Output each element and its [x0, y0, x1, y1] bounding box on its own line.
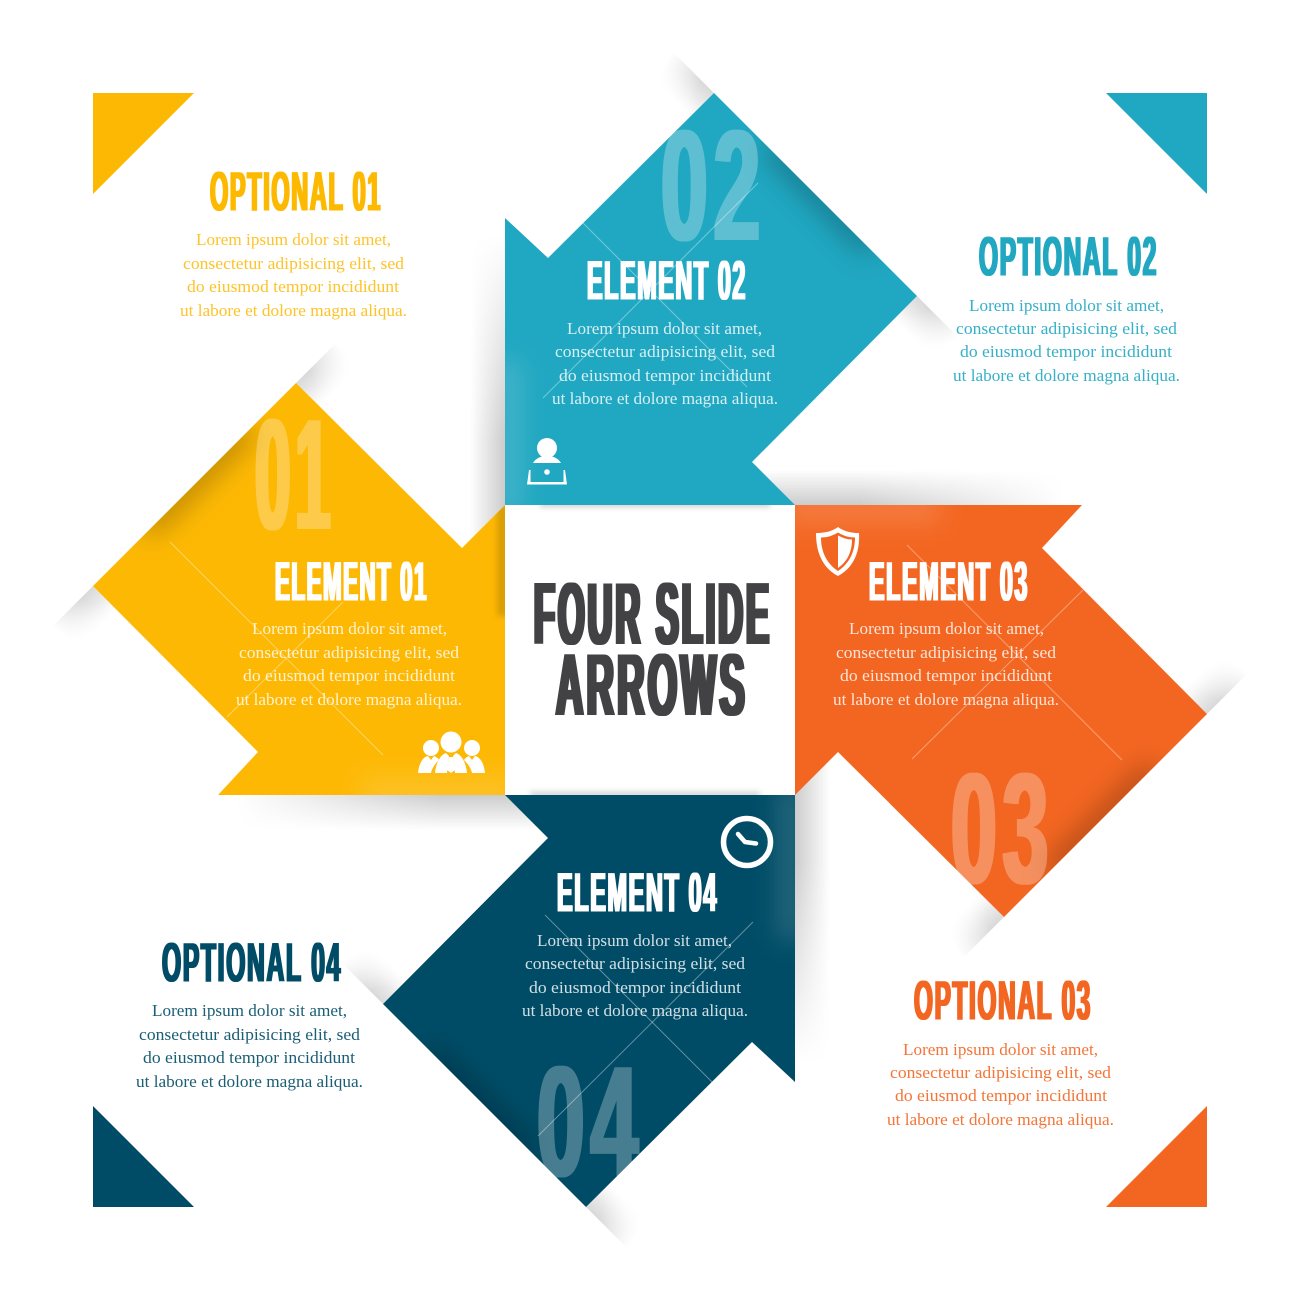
panel: arrow 01 yellow: 01	[255, 387, 335, 563]
panel: center square with title: ARROWS	[556, 635, 748, 734]
body text: element 03: do eiusmod tempor incididunt	[840, 666, 1052, 685]
text block: optional 03: consectetur adipisicing elit, sed	[890, 1063, 1112, 1082]
text: OPTIONAL 04	[162, 930, 342, 994]
body text: element 04: Lorem ipsum dolor sit amet,	[537, 931, 732, 950]
body text: element 04: do eiusmod tempor incididunt	[529, 978, 741, 997]
text block: optional 03: do eiusmod tempor incididunt	[895, 1086, 1107, 1105]
panel: arrow 02 teal: ELEMENT 02	[587, 248, 747, 312]
corner triangle: orange	[1106, 1106, 1207, 1207]
number 04: 04	[537, 1034, 644, 1210]
text block: optional 02: Lorem ipsum dolor sit amet,	[969, 296, 1164, 315]
title	[534, 564, 772, 734]
icon: clock	[724, 818, 770, 866]
panel: arrow 04 navy	[383, 785, 805, 1210]
text: OPTIONAL 01	[210, 160, 382, 222]
panel: arrow 01 yellow	[93, 383, 515, 805]
number 03: 03	[951, 741, 1054, 917]
body text: element 04: consectetur adipisicing elit, sed	[525, 954, 746, 973]
body text: element 03: Lorem ipsum dolor sit amet,	[849, 619, 1044, 638]
body text: element 04	[522, 931, 748, 1020]
panel: arrow 03 orange	[785, 495, 1207, 917]
text block: optional 03: ut labore et dolore magna aliqua.	[887, 1110, 1114, 1129]
body text: element 01: do eiusmod tempor incididunt	[243, 666, 455, 685]
text block: optional 02	[953, 224, 1180, 385]
body text: element 04: ut labore et dolore magna aliqua.	[522, 1001, 748, 1020]
text block: optional 04: Lorem ipsum dolor sit amet,	[152, 1001, 347, 1020]
panel: arrow 01 yellow: ELEMENT 01	[275, 550, 428, 612]
body text: element 02: Lorem ipsum dolor sit amet,	[567, 319, 762, 338]
body text: element 03: consectetur adipisicing elit, sed	[836, 643, 1057, 662]
text block: optional 01: do eiusmod tempor incididunt	[187, 277, 399, 296]
body text: element 02: do eiusmod tempor incididunt	[559, 366, 771, 385]
text block: optional 03	[887, 968, 1114, 1129]
body text: element 03: ut labore et dolore magna aliqua.	[833, 690, 1059, 709]
number 02: 02	[661, 98, 766, 274]
body text: element 02	[552, 319, 778, 408]
text block: optional 01: Lorem ipsum dolor sit amet,	[196, 230, 391, 249]
text: FOUR SLIDE	[534, 564, 772, 663]
text block: optional 04: ut labore et dolore magna aliqua.	[136, 1072, 363, 1091]
body text: element 02: consectetur adipisicing elit, sed	[555, 342, 776, 361]
panel: arrow 03 orange: ELEMENT 03	[869, 550, 1029, 612]
panel: center square with title	[528, 505, 772, 795]
text block: optional 02: do eiusmod tempor incididunt	[960, 342, 1172, 361]
text block: optional 04: consectetur adipisicing elit, sed	[139, 1025, 361, 1044]
body text: element 01: ut labore et dolore magna aliqua.	[236, 690, 462, 709]
corner triangle: navy	[93, 1106, 194, 1207]
icon: shield	[816, 527, 859, 576]
corner triangle: teal	[1106, 93, 1207, 194]
body text: element 03	[833, 619, 1059, 709]
text block: optional 04	[136, 930, 363, 1091]
panel: arrow 04 navy: ELEMENT 04	[557, 860, 718, 924]
text block: optional 02: consectetur adipisicing elit, sed	[956, 319, 1178, 338]
panel: arrow 02 teal	[495, 93, 917, 515]
text block: optional 01: ut labore et dolore magna aliqua.	[180, 301, 407, 320]
body text: element 01: consectetur adipisicing elit, sed	[239, 643, 460, 662]
text block: optional 04: do eiusmod tempor incididunt	[143, 1048, 355, 1067]
icon: team of people	[418, 732, 485, 773]
text block: optional 03: Lorem ipsum dolor sit amet,	[903, 1040, 1098, 1059]
text block: optional 02: ut labore et dolore magna aliqua.	[953, 366, 1180, 385]
body text: element 01	[236, 619, 462, 709]
corner triangle: yellow	[93, 93, 194, 194]
body text: element 01: Lorem ipsum dolor sit amet,	[252, 619, 447, 638]
text block: optional 01	[180, 160, 407, 320]
text block: optional 01: consectetur adipisicing elit, sed	[183, 254, 405, 273]
body text: element 02: ut labore et dolore magna aliqua.	[552, 389, 778, 408]
icon: person at laptop	[527, 438, 567, 484]
